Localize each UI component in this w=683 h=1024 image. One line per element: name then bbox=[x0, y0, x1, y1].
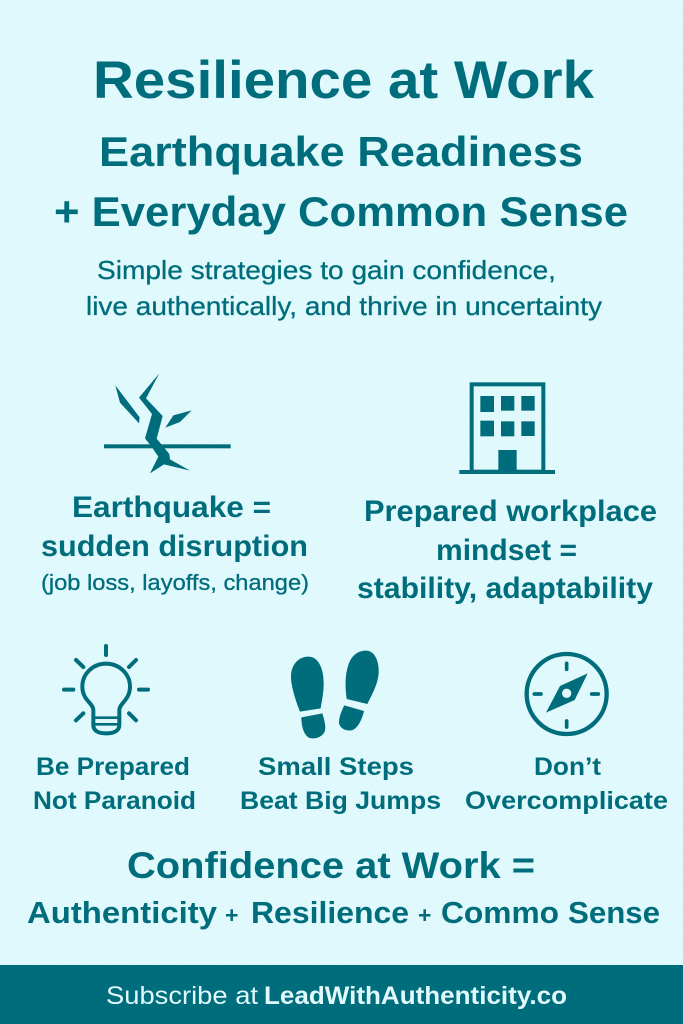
tagline bbox=[86, 255, 602, 321]
tagline: Simple strategies to gain confidence, bbox=[97, 255, 556, 285]
text: earthquake disruption: sudden disruption bbox=[41, 530, 308, 563]
footer banner: Subscribe at bbox=[106, 982, 258, 1010]
text: be prepared: Be Prepared bbox=[36, 753, 190, 781]
conclusion formula: + bbox=[225, 902, 238, 928]
text: earthquake disruption: (job loss, layoffs, change) bbox=[41, 570, 309, 595]
text: be prepared: Not Paranoid bbox=[33, 787, 196, 815]
text: earthquake disruption bbox=[41, 491, 309, 595]
subtitle heading bbox=[54, 128, 628, 235]
icon: office building bbox=[459, 384, 555, 474]
subtitle heading: + Everyday Common Sense bbox=[54, 188, 628, 235]
icon: footprints bbox=[291, 651, 379, 738]
conclusion formula bbox=[27, 845, 660, 930]
text: earthquake disruption: Earthquake = bbox=[72, 491, 271, 524]
conclusion formula: Sense bbox=[568, 895, 660, 930]
conclusion formula: Confidence at Work = bbox=[127, 845, 535, 886]
text: prepared workplace: stability, adaptability bbox=[357, 572, 653, 605]
icon: light bulb bbox=[64, 646, 148, 733]
footer banner bbox=[0, 965, 683, 1024]
text: small steps bbox=[240, 753, 441, 815]
title: Resilience at Work bbox=[93, 51, 595, 110]
text: prepared workplace bbox=[357, 495, 657, 605]
text: small steps: Small Steps bbox=[258, 753, 414, 781]
text: small steps: Beat Big Jumps bbox=[240, 787, 441, 815]
conclusion formula: Authenticity bbox=[27, 895, 218, 930]
text: don't overcomplicate: Overcomplicate bbox=[465, 787, 668, 815]
subtitle heading: Earthquake Readiness bbox=[99, 128, 583, 175]
text: be prepared bbox=[33, 753, 196, 815]
footer banner: LeadWithAuthenticity.co bbox=[264, 982, 567, 1010]
text: prepared workplace: mindset = bbox=[436, 534, 577, 567]
text: prepared workplace: Prepared workplace bbox=[364, 495, 657, 528]
icon: earthquake crack bbox=[104, 373, 231, 473]
conclusion formula: + bbox=[418, 902, 431, 928]
tagline: live authentically, and thrive in uncertainty bbox=[86, 291, 602, 321]
conclusion formula: Resilience bbox=[251, 895, 409, 930]
icon: compass bbox=[527, 654, 607, 734]
text: don't overcomplicate: Don’t bbox=[534, 753, 602, 781]
conclusion formula: Commo bbox=[441, 895, 559, 930]
text: don't overcomplicate bbox=[465, 753, 668, 815]
